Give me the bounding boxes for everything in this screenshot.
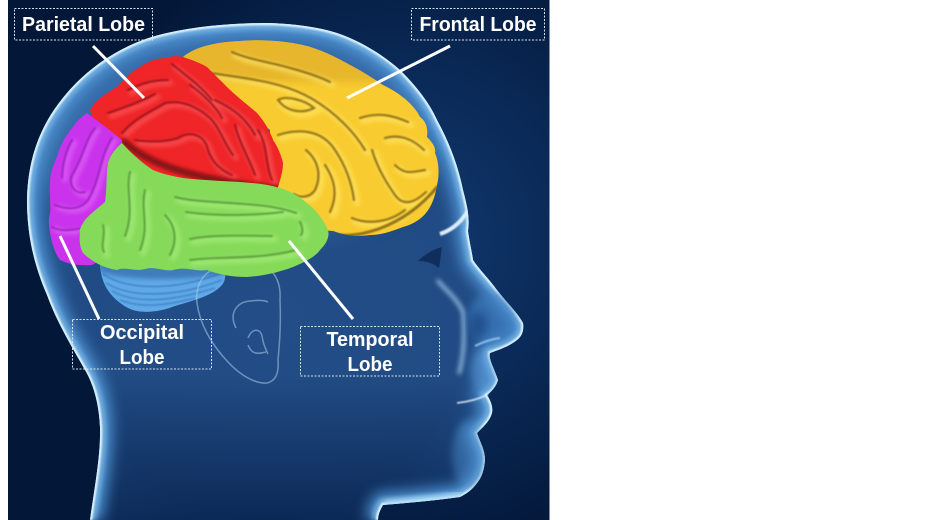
cerebellum	[100, 265, 226, 312]
face highlights	[440, 205, 471, 234]
label: temporal lobe	[300, 326, 440, 376]
head silhouette	[27, 23, 524, 520]
lobe: temporal	[80, 143, 328, 277]
lobe: occipital	[48, 113, 122, 266]
background panel	[8, 0, 550, 520]
pointer line: frontal	[347, 46, 450, 98]
infographic: lobes of the brain	[8, 0, 550, 520]
label: frontal lobe	[412, 8, 544, 40]
lobe: parietal	[90, 56, 283, 188]
eye	[418, 247, 442, 268]
lobe: frontal	[183, 40, 439, 236]
mouth line	[457, 394, 488, 403]
label: occipital lobe: Occipital	[100, 322, 184, 344]
nostril	[475, 338, 500, 346]
label: frontal lobe: Frontal Lobe	[420, 14, 536, 36]
label: parietal lobe	[14, 8, 152, 40]
label: occipital lobe	[72, 320, 212, 369]
pointer line: parietal	[93, 46, 144, 98]
label: parietal lobe: Parietal Lobe	[22, 14, 145, 36]
pointer line: occipital	[60, 236, 99, 319]
ear	[197, 262, 280, 383]
label: temporal lobe: Lobe	[348, 354, 392, 376]
pointer line: temporal	[289, 241, 353, 319]
label: temporal lobe: Temporal	[326, 329, 414, 351]
label: occipital lobe: Lobe	[120, 347, 164, 369]
